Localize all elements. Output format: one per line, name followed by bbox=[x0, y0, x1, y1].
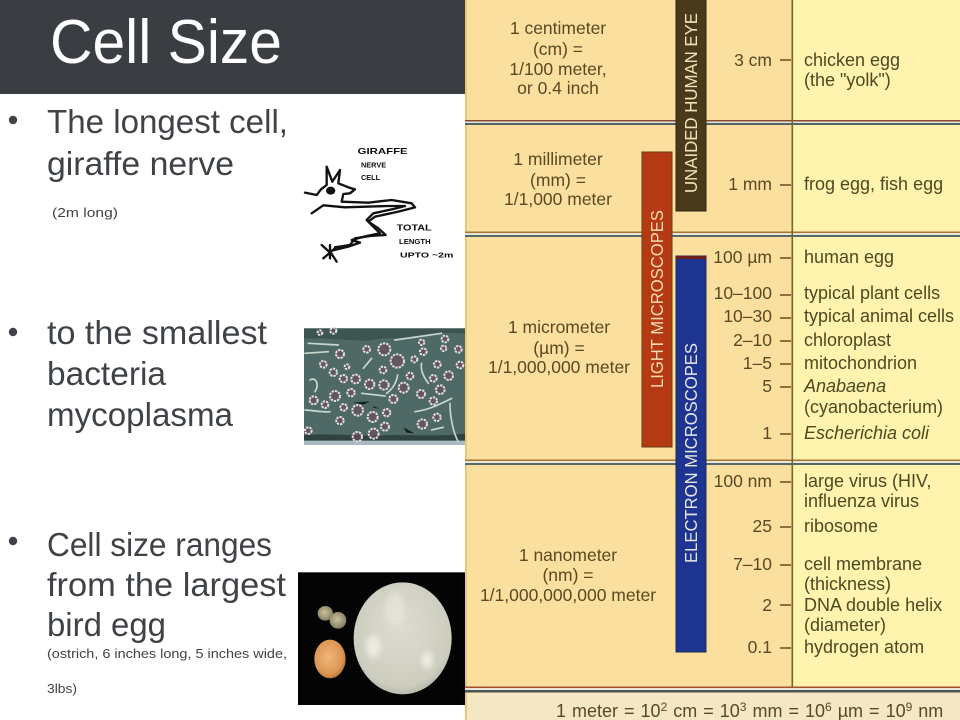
specimen names: (the "yolk") bbox=[804, 70, 891, 90]
bullet: smallest bacteria bbox=[9, 314, 267, 433]
specimen names: Escherichia coli bbox=[804, 423, 930, 443]
unit: nanometer: 1/1,000,000,000 meter bbox=[480, 585, 656, 605]
sketch note: total length: TOTAL bbox=[397, 224, 432, 233]
specimen names: (cyanobacterium) bbox=[804, 397, 943, 417]
size values: 100 µm bbox=[713, 247, 772, 267]
scale tick marks bbox=[780, 60, 791, 648]
unit: micrometer: (µm) = bbox=[533, 338, 585, 358]
specimen names: hydrogen atom bbox=[804, 637, 924, 657]
specimen names bbox=[803, 50, 954, 657]
scale divider bands bbox=[465, 120, 960, 692]
unit: centimeter: 1/100 meter, bbox=[509, 59, 607, 79]
bullet: longest cell: giraffe nerve bbox=[47, 145, 234, 182]
bullet: size range: 3lbs) bbox=[47, 681, 77, 696]
chart background bbox=[465, 0, 960, 720]
sketch note: giraffe nerve cell: GIRAFFE bbox=[358, 146, 408, 156]
size values: 2 bbox=[762, 595, 772, 615]
specimen names: chloroplast bbox=[804, 330, 891, 350]
title: Cell Size bbox=[50, 8, 282, 77]
conversion formula: 2 bbox=[661, 700, 668, 714]
size values: 0.1 bbox=[748, 637, 772, 657]
size values: 10–30 bbox=[723, 306, 772, 326]
unit: centimeter: or 0.4 inch bbox=[517, 78, 599, 98]
unit: nanometer: 1 nanometer bbox=[519, 545, 617, 565]
specimen names: (thickness) bbox=[804, 574, 891, 594]
bar: unaided human eye: UNAIDED HUMAN EYE bbox=[681, 13, 701, 193]
bullet: size range: from the largest bbox=[47, 566, 286, 603]
sketch note: total length: LENGTH bbox=[399, 239, 431, 246]
bullet: longest cell bbox=[9, 103, 288, 220]
size values: 100 nm bbox=[714, 471, 772, 491]
sketch note: total length: UPTO ~2m bbox=[400, 250, 454, 259]
unit: millimeter: 1 millimeter bbox=[513, 149, 603, 169]
size values: 2–10 bbox=[733, 330, 772, 350]
size scale chart bbox=[465, 0, 960, 720]
size values bbox=[713, 50, 772, 657]
title banner bbox=[0, 0, 466, 94]
giraffe nerve cell sketch bbox=[305, 146, 454, 262]
specimen names: Anabaena bbox=[803, 376, 886, 396]
bullet: size range: Cell size ranges bbox=[47, 526, 272, 563]
unit: millimeter: 1/1,000 meter bbox=[504, 189, 612, 209]
specimen names: influenza virus bbox=[804, 491, 919, 511]
specimen names: typical animal cells bbox=[804, 306, 954, 326]
eggs photograph bbox=[298, 572, 465, 705]
unit: centimeter: 1 centimeter bbox=[510, 18, 606, 38]
specimen names: large virus (HIV, bbox=[804, 471, 931, 491]
specimen names: mitochondrion bbox=[804, 353, 917, 373]
bullet: longest cell: (2m long) bbox=[52, 205, 118, 220]
bullet: smallest bacteria: mycoplasma bbox=[47, 396, 234, 433]
bullet: size range: (ostrich, 6 inches long, 5 inches wide, bbox=[47, 646, 287, 661]
size values: 3 cm bbox=[734, 50, 772, 70]
scale axis line bbox=[792, 0, 793, 687]
specimen names: cell membrane bbox=[804, 554, 922, 574]
specimen names: human egg bbox=[804, 247, 894, 267]
size values: 25 bbox=[753, 516, 772, 536]
bar: unaided human eye bbox=[676, 0, 706, 211]
unit: micrometer: 1/1,000,000 meter bbox=[488, 357, 630, 377]
bar: electron microscopes bbox=[676, 256, 706, 652]
bullet: size range bbox=[9, 526, 287, 696]
bullet: size range: bird egg bbox=[47, 606, 166, 643]
size values: 1 mm bbox=[728, 174, 772, 194]
sketch note: giraffe nerve cell: NERVE bbox=[361, 160, 386, 169]
size values: 1–5 bbox=[743, 353, 772, 373]
unit definitions bbox=[480, 18, 656, 605]
bullet: smallest bacteria: to the smallest bbox=[47, 314, 267, 351]
size values: 1 bbox=[762, 423, 772, 443]
unit: nanometer: (nm) = bbox=[542, 565, 594, 585]
specimen names: frog egg, fish egg bbox=[804, 174, 943, 194]
unit: centimeter: (cm) = bbox=[533, 39, 583, 59]
bar: electron microscopes: ELECTRON MICROSCOPES bbox=[681, 343, 701, 563]
specimen names: (diameter) bbox=[804, 615, 886, 635]
specimen names: typical plant cells bbox=[804, 283, 940, 303]
bullet: longest cell: The longest cell, bbox=[47, 103, 288, 140]
hen egg bbox=[314, 640, 346, 678]
mycoplasma micrograph bbox=[304, 328, 465, 445]
bullet list bbox=[9, 103, 288, 696]
bar: light microscopes bbox=[642, 152, 672, 447]
ostrich egg bbox=[354, 582, 452, 694]
bar: light microscopes: LIGHT MICROSCOPES bbox=[647, 210, 667, 388]
size values: 5 bbox=[762, 376, 772, 396]
specimen names: ribosome bbox=[804, 516, 878, 536]
unit: millimeter: (mm) = bbox=[530, 170, 586, 190]
unit: micrometer: 1 micrometer bbox=[508, 317, 610, 337]
size values: 7–10 bbox=[733, 554, 772, 574]
sketch note: giraffe nerve cell: CELL bbox=[361, 173, 381, 182]
conversion formula: 3 bbox=[740, 700, 747, 714]
size values: 10–100 bbox=[714, 283, 772, 303]
conversion formula: 6 bbox=[825, 700, 832, 714]
quail eggs bbox=[318, 606, 346, 629]
specimen names: chicken egg bbox=[804, 50, 900, 70]
conversion formula: 9 bbox=[906, 700, 913, 714]
bullet: smallest bacteria: bacteria bbox=[47, 355, 167, 392]
specimen names: DNA double helix bbox=[804, 595, 942, 615]
